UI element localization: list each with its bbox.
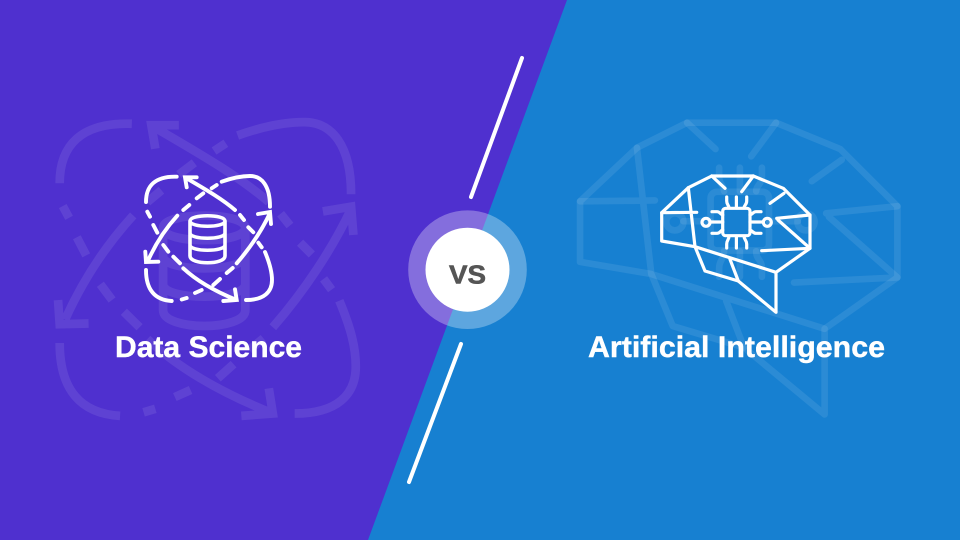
heading: artificial intelligence: Artificial Intelligence (588, 331, 885, 364)
icon: brain ghost watermark (580, 123, 897, 414)
chip pins (710, 197, 764, 248)
badge label: VS (449, 260, 486, 290)
dashes and arrow: lower right (147, 212, 237, 301)
brain folds (662, 176, 810, 281)
icon: brain with chip (662, 176, 810, 312)
badge: vs (408, 210, 527, 329)
dashes and arrow: lower left (145, 185, 217, 262)
dashes and arrow: upper right (182, 212, 271, 300)
badge inner disc (426, 228, 510, 312)
decorative line: upper slash (471, 58, 522, 197)
icon: data science ghost watermark (58, 122, 356, 416)
dashes and arrow: upper left (185, 177, 262, 247)
database cylinder (190, 216, 225, 263)
brain outline (662, 176, 810, 312)
chip left node (702, 218, 710, 226)
chip right node (763, 218, 771, 226)
orbit arcs (146, 177, 177, 202)
decorative line: lower slash (409, 344, 461, 482)
panel: artificial intelligence background (368, 0, 960, 540)
badge outer ring (408, 210, 527, 329)
chip body (723, 208, 750, 236)
heading: data science: Data Science (115, 331, 302, 364)
icon: data science atom with database (145, 176, 272, 301)
